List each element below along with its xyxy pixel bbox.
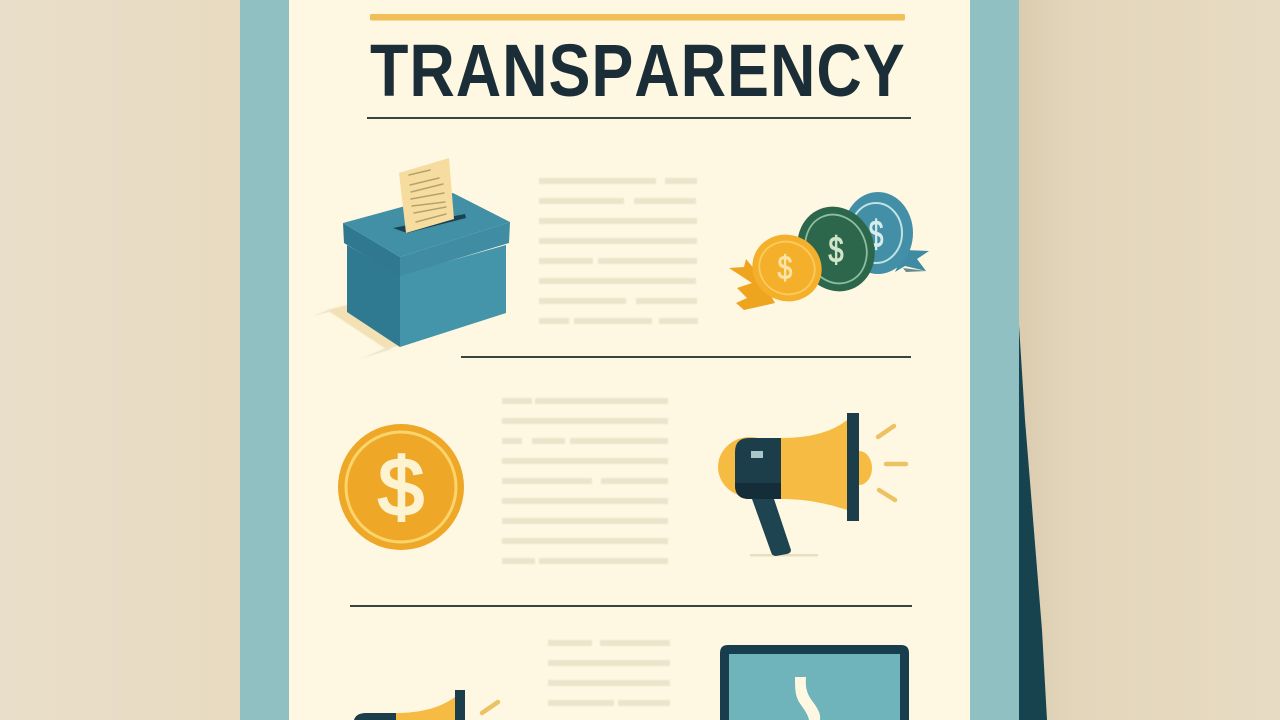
- text block: row one placeholder lines: [539, 178, 698, 324]
- icon: green coin: [785, 195, 887, 303]
- icon: yellow coin: [729, 223, 833, 313]
- icon: blue coin: [843, 192, 929, 274]
- icon: monitor screen: [720, 645, 909, 720]
- icon: dollar coin: $: [378, 442, 424, 533]
- title rule: [367, 117, 911, 119]
- section rule one: [461, 356, 911, 358]
- icon: ballot box: [313, 158, 510, 359]
- icon: small megaphone: [354, 690, 498, 720]
- icon: large megaphone: [718, 413, 906, 556]
- title accent bar: [370, 14, 905, 20]
- poster sheet: [240, 0, 1019, 720]
- icon: yellow coin: $: [778, 250, 793, 287]
- icon: dollar coin: [338, 424, 464, 550]
- icon: blue coin: $: [869, 212, 883, 255]
- icon: stacked coins with ribbons: [729, 192, 929, 313]
- icon: green coin: $: [828, 229, 844, 270]
- poster shadow: [1019, 325, 1047, 720]
- section rule two: [350, 605, 912, 607]
- title: TRANSPARENCY: [370, 29, 905, 112]
- text block: row two placeholder lines: [502, 398, 668, 564]
- icon: ballot paper: [399, 158, 454, 233]
- text block: row three placeholder lines: [548, 640, 670, 706]
